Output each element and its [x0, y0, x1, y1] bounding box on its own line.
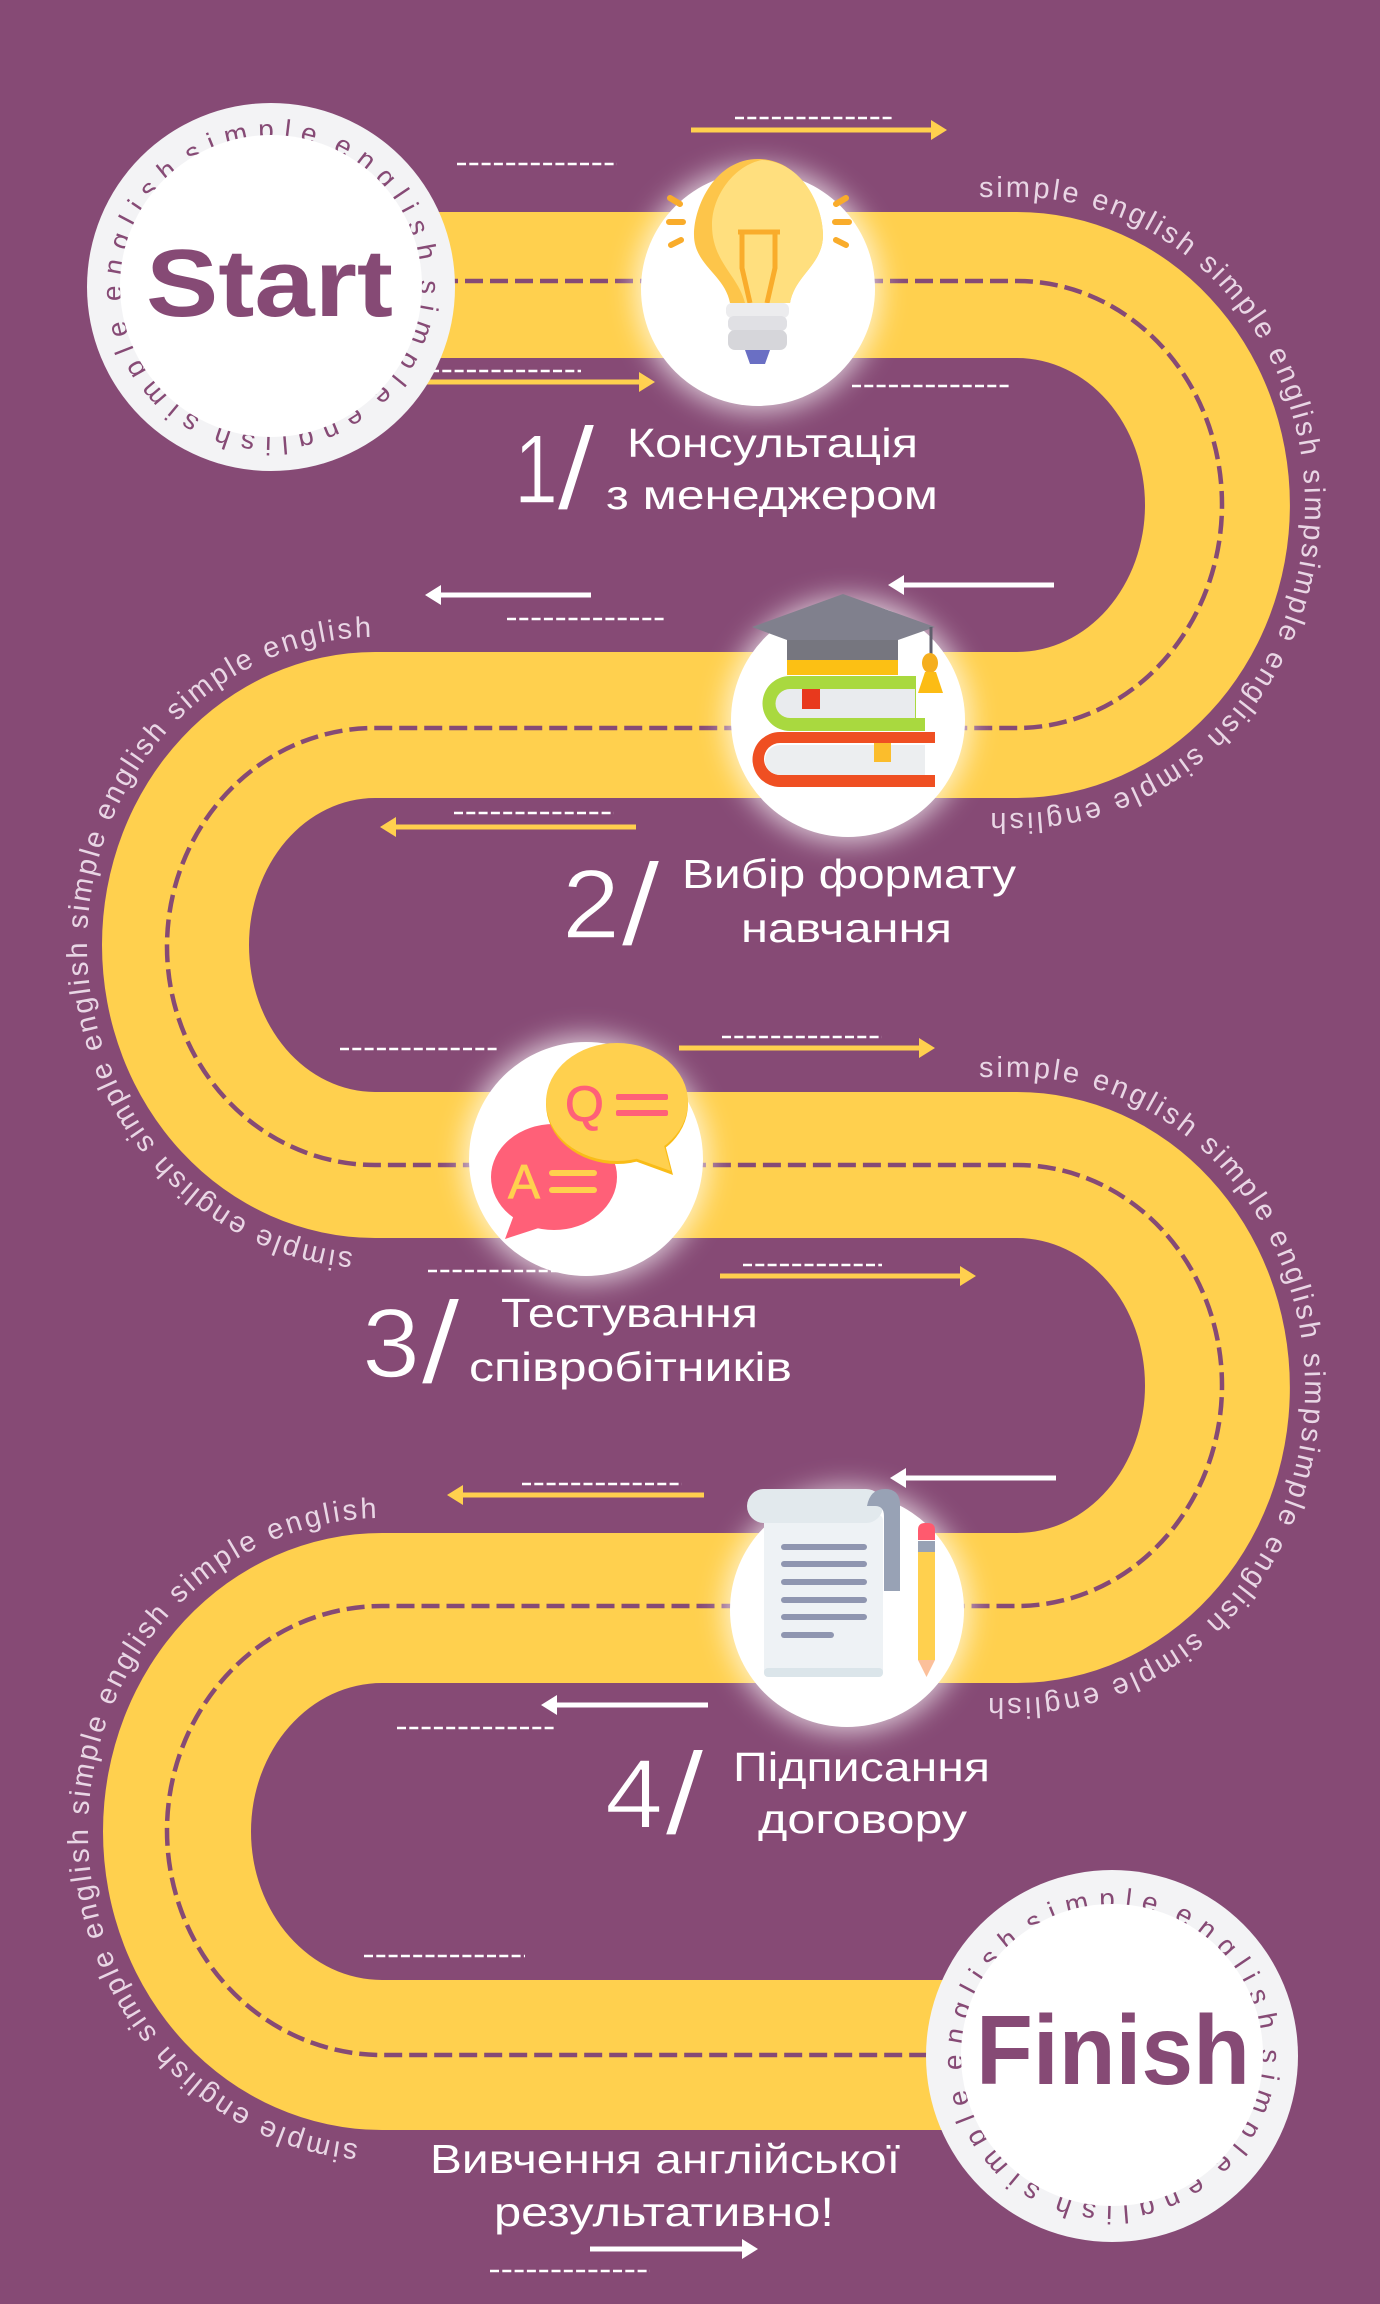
- icon: contract and pencil: [725, 1488, 969, 1732]
- curved text: second right turn: simple english simple english simpsimple english simple english: [980, 1056, 1326, 1719]
- icon: light bulb: [636, 159, 880, 411]
- step 2 label: [682, 851, 1017, 951]
- finish badge: simple english simple english simple english: [948, 1888, 1280, 2224]
- thin white dashed accents: [340, 118, 1011, 2271]
- step 3 number: /: [421, 1277, 461, 1408]
- step 1 number: [514, 403, 596, 534]
- icon: Q and A speech bubbles: A: [508, 1156, 540, 1209]
- step 2 number: [562, 839, 661, 970]
- winding yellow road: [102, 212, 1290, 2130]
- step 3 label: Тестування: [501, 1290, 758, 1336]
- step 1 number: /: [557, 403, 596, 534]
- arrow: yellow right middle: [679, 1038, 935, 1058]
- step 1 label: з менеджером: [606, 472, 938, 518]
- road centre dashed line: [167, 281, 1222, 2055]
- arrow: white left near document: [890, 1468, 1056, 1488]
- step 4 label: [733, 1744, 990, 1842]
- step 4 number: 4: [605, 1739, 663, 1849]
- step 1 label: Консультація: [627, 420, 918, 466]
- arrow: yellow right under start: [427, 372, 655, 392]
- start badge: simple english simple english simple english: [106, 119, 439, 456]
- arrow: white left near books: [888, 575, 1054, 595]
- step 4 number: [605, 1728, 705, 1859]
- finish badge: Finish: [976, 1995, 1250, 2105]
- icon: Q and A speech bubbles: Q: [565, 1076, 604, 1132]
- step 4 number: /: [665, 1728, 705, 1859]
- closing message: [430, 2136, 900, 2235]
- arrow: white right bottom: [590, 2239, 758, 2259]
- closing message: результативно!: [494, 2189, 834, 2235]
- icon: books and graduation cap: [726, 594, 970, 842]
- step 2 label: навчання: [741, 905, 952, 951]
- arrow: yellow left lower: [447, 1485, 704, 1505]
- step 2 label: Вибір формату: [682, 851, 1017, 897]
- curved text: second left turn: simple english simple english simple english simple english: [67, 1498, 375, 2162]
- arrow: yellow right top: [691, 120, 947, 140]
- step 1 number: 1: [514, 414, 558, 524]
- arrow: white left lower: [541, 1695, 708, 1715]
- step 2 number: /: [621, 839, 661, 970]
- arrow: white left upper: [425, 585, 591, 605]
- step 2 number: 2: [562, 849, 620, 959]
- step 4 label: Підписання: [733, 1744, 990, 1790]
- curved text: first right turn: simple english simple english simpsimple english simple english: [980, 176, 1326, 834]
- closing message: Вивчення англійської: [430, 2136, 900, 2182]
- step 3 number: 3: [362, 1288, 420, 1398]
- arrow: yellow left upper: [380, 817, 636, 837]
- step 3 number: [362, 1277, 461, 1408]
- step 3 label: співробітників: [469, 1344, 792, 1390]
- curved text: first left turn: simple english simple english simple english simple english: [66, 616, 370, 1271]
- arrow: yellow right under QA: [720, 1266, 976, 1286]
- start badge: Start: [146, 230, 393, 337]
- step 1 label: [606, 420, 938, 518]
- step 3 label: [469, 1290, 792, 1390]
- step 4 label: договору: [758, 1796, 968, 1842]
- icon: Q and A speech bubbles: [464, 1037, 708, 1281]
